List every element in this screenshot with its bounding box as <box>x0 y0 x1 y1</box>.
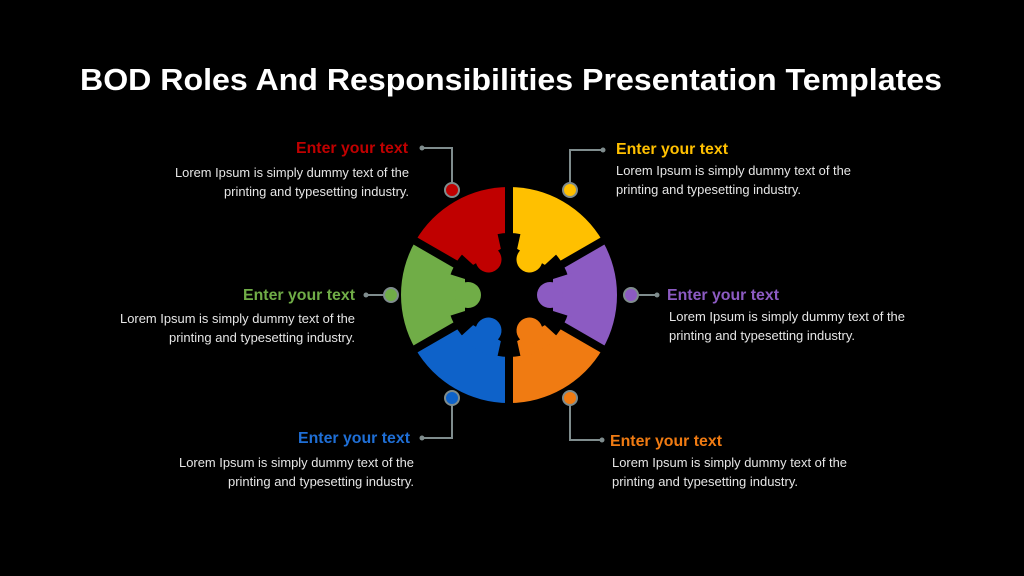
text: purple: Enter your text <box>667 287 780 304</box>
text: green <box>120 287 356 345</box>
connectors <box>366 148 657 440</box>
text: orange: Lorem Ipsum is simply dummy text of the <box>612 455 847 470</box>
text: blue <box>179 430 414 489</box>
text: orange: Enter your text <box>610 433 723 450</box>
text: orange: printing and typesetting industry. <box>612 474 798 489</box>
text: green: printing and typesetting industry. <box>169 330 355 345</box>
text: green: Enter your text <box>243 287 356 304</box>
text: blue: printing and typesetting industry. <box>228 474 414 489</box>
text: red: Lorem Ipsum is simply dummy text of the <box>175 165 409 180</box>
text: yellow <box>616 141 851 197</box>
text: red <box>175 140 409 199</box>
knobs <box>446 229 572 361</box>
title: BOD Roles And Responsibilities Presentation Templates <box>80 62 942 97</box>
connector dots <box>384 183 638 405</box>
text: yellow: printing and typesetting industry. <box>616 182 801 197</box>
segment: blue <box>408 268 556 416</box>
puzzle circle <box>401 174 617 416</box>
text: green: Lorem Ipsum is simply dummy text of the <box>120 311 355 326</box>
text: purple <box>667 287 905 343</box>
segment: orange <box>462 268 610 416</box>
segment: purple <box>509 241 617 349</box>
segment: red <box>408 174 556 322</box>
segment: yellow <box>462 174 610 322</box>
text: red: Enter your text <box>296 140 409 157</box>
segment: green <box>401 241 509 349</box>
text: orange <box>610 433 847 489</box>
text: blue: Lorem Ipsum is simply dummy text of the <box>179 455 414 470</box>
text: purple: printing and typesetting industry. <box>669 328 855 343</box>
text: purple: Lorem Ipsum is simply dummy text of the <box>669 309 905 324</box>
text: blue: Enter your text <box>298 430 411 447</box>
text: red: printing and typesetting industry. <box>224 184 409 199</box>
text: yellow: Enter your text <box>616 141 729 158</box>
text: yellow: Lorem Ipsum is simply dummy text of the <box>616 163 851 178</box>
